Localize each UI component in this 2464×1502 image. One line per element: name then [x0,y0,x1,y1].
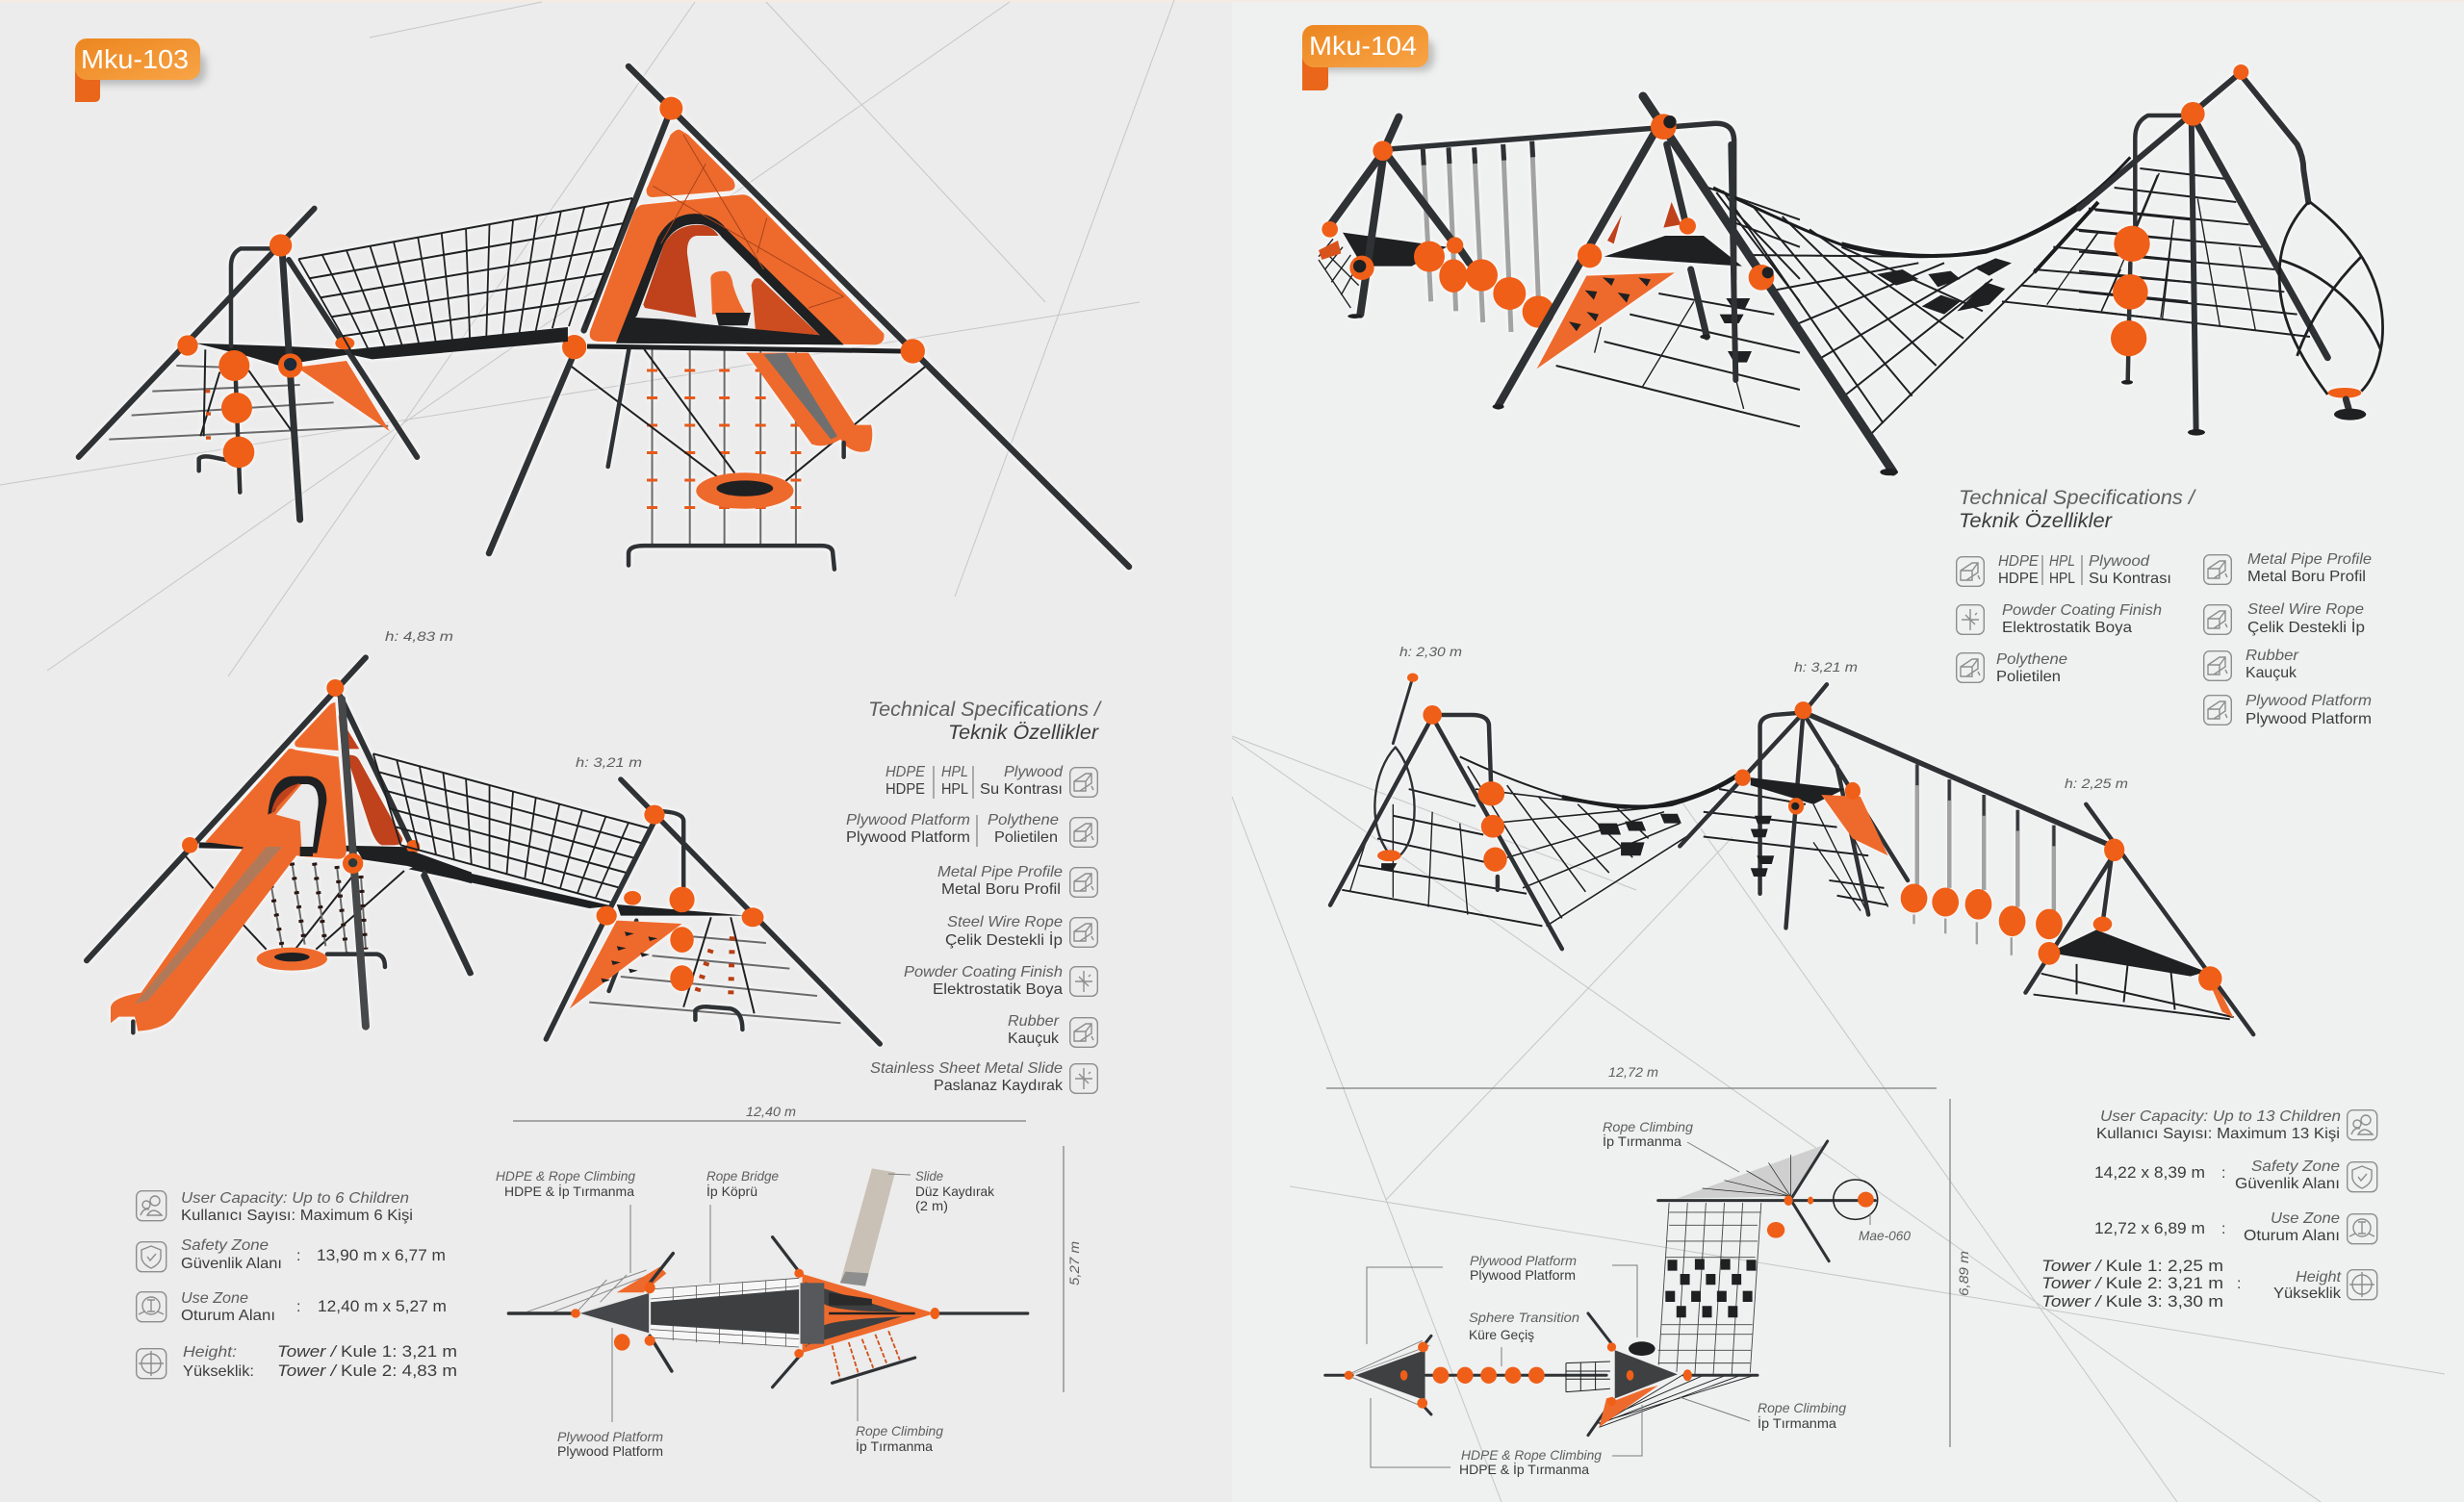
spec: Rubber [1008,1013,1097,1047]
spec: HDPE HPL Plywood: HPL [941,781,968,798]
use zone: 12,40 m x 5,27 m [318,1297,447,1315]
dimension label: h 3,21 m: h: 3,21 m [576,754,642,770]
user capacity [2096,1108,2377,1142]
user capacity: User Capacity: Up to 13 Children [2100,1108,2341,1125]
heading: Teknik Özellikler [948,722,1099,744]
bridge net and small tower [373,753,880,1044]
badge: Mku-104 [1302,25,1434,90]
callouts: Mku-104 plan: HDPE & İp Tırmanma [1459,1461,1589,1477]
spec: HDPE HPL Plywood: Su Kontrası [2089,571,2171,587]
saddle net [1643,96,2192,475]
callouts: Mku-104 plan: Rope Climbing [1603,1119,1693,1134]
spec: Rubber [2204,648,2299,681]
callouts: Mku-104 plan: Sphere Transition [1469,1310,1579,1325]
height [137,1342,457,1380]
left tower with bridge floor [79,209,568,520]
rope ladder and swing [570,347,927,570]
plan dimensions: Mku-103: 12,40 m [746,1104,796,1119]
callouts: Mku-103 plan: HDPE & Rope Climbing [496,1168,635,1184]
specifications: Mku-104 dimensions [2041,1108,2377,1311]
heading: Technical Specifications / [868,699,1102,721]
safety zone [2094,1158,2377,1192]
spec: HDPE HPL Plywood: HDPE [886,781,925,798]
spec: Powder Coating Finish: Powder Coating Finish [904,964,1063,980]
safety zone: : [296,1248,300,1264]
plan view: Mku-104 [1325,1141,1878,1436]
badge: Mku-104: Mku-104 [1309,31,1417,61]
heading: Technical Specifications / [1959,487,2196,509]
spec: Plywood Platform, Polythene: Polietilen [994,829,1058,846]
spec: Polythene: Polythene [1996,651,2067,668]
spec: Metal Pipe Profile: Metal Pipe Profile [2247,551,2372,568]
big tower with arch and slide [584,118,902,467]
spec: HDPE HPL Plywood [886,764,1097,799]
spec: Metal Pipe Profile [2204,551,2372,585]
spec: Powder Coating Finish: Powder Coating Finish [2002,602,2162,619]
callouts: Mku-103 plan: Düz Kaydırak [915,1184,995,1199]
user capacity: Kullanıcı Sayısı: Maximum 6 Kişi [181,1208,413,1224]
safety zone: Safety Zone [181,1237,269,1254]
tower joints [562,97,925,364]
use zone: Oturum Alanı [2244,1228,2340,1244]
spec: HDPE HPL Plywood: HPL [2049,553,2075,570]
right tower with spinner ring [2079,64,2383,436]
callouts: Mku-104 plan: Plywood Platform [1470,1267,1576,1283]
user capacity: Kullanıcı Sayısı: Maximum 13 Kişi [2096,1126,2340,1142]
callouts: Mku-103 plan: (2 m) [915,1198,948,1213]
height: Height [2296,1269,2342,1286]
callouts: Mku-103 plan: HDPE & İp Tırmanma [504,1183,634,1199]
use zone: Use Zone [2271,1210,2340,1227]
spec: HDPE HPL Plywood: Plywood [2089,553,2150,570]
heading: Teknik Özellikler [1959,510,2113,532]
spec: Metal Pipe Profile: Metal Boru Profil [2247,569,2366,585]
safety zone [137,1237,446,1272]
hero render: Mku-104 front view [1319,64,2383,475]
spec: HDPE HPL Plywood: HDPE [1998,571,2039,587]
spec: Polythene: Polietilen [1996,669,2061,685]
spec: Plywood Platform, Polythene: Plywood Platform [846,829,970,846]
spec: Plywood Platform, Polythene [846,812,1097,847]
specifications: Mku-103 materials [846,699,1102,1094]
spec: Powder Coating Finish [904,964,1097,998]
spec: Steel Wire Rope [945,914,1097,949]
use zone: : [2221,1221,2225,1237]
use zone: : [296,1299,300,1315]
tower legs [489,66,1129,567]
hero render: Mku-103 front view [79,66,1129,570]
height [2041,1257,2377,1311]
height: Tower / Kule 1: 3,21 m [277,1342,457,1361]
user capacity: User Capacity: Up to 6 Children [181,1190,409,1207]
use zone: Use Zone [181,1290,248,1307]
spec: Steel Wire Rope: Çelik Destekli İp [945,930,1063,949]
spec: Powder Coating Finish [1957,602,2162,636]
spec: HDPE HPL Plywood: HDPE [886,764,925,780]
spec: Metal Pipe Profile [937,864,1097,898]
spec: Stainless Sheet Metal Slide: Stainless Sheet Metal Slide [870,1060,1063,1077]
spec: Stainless Sheet Metal Slide [870,1060,1097,1094]
spec: Plywood Platform: Plywood Platform [2246,711,2372,727]
callouts: Mku-104 plan: İp Tırmanma [1758,1414,1836,1431]
height: Yükseklik: [183,1363,254,1380]
badge: Mku-103: Mku-103 [81,44,189,74]
callouts: Mku-103 plan: Rope Climbing [856,1423,943,1438]
spec: Stainless Sheet Metal Slide: Paslanaz Kaydırak [934,1078,1064,1094]
safety zone: 14,22 x 8,39 m [2094,1163,2205,1182]
spec: HDPE HPL Plywood [1957,553,2171,587]
use zone [2094,1210,2377,1244]
spec: Steel Wire Rope: Steel Wire Rope [2247,601,2364,618]
rope bridge net [298,198,632,355]
dimension label: h 4,83 m: h: 4,83 m [385,628,453,644]
callouts: Mku-103 plan: Plywood Platform [557,1443,663,1459]
callouts: Mku-104 plan: Mae-060 [1859,1228,1911,1243]
callouts: Mku-104 plan: HDPE & Rope Climbing [1461,1447,1602,1463]
callouts: Mku-103 plan: İp Tırmanma [856,1438,933,1454]
spec: HDPE HPL Plywood: HPL [2049,571,2075,587]
callouts: Mku-103 plan: Plywood Platform [557,1429,663,1444]
callouts: Mku-104 plan: Küre Geçiş [1469,1327,1534,1342]
swing beam towers [1319,117,1800,426]
tower with slide [87,657,472,1032]
spec: Metal Pipe Profile: Metal Boru Profil [941,881,1061,898]
side render: Mku-104 rear view [1330,673,2253,1034]
spec: Rubber: Rubber [1008,1013,1060,1030]
dimension labels: Mku-104 towers [1399,644,2128,791]
specifications: Mku-104 materials [1957,487,2372,727]
heading [868,699,1102,744]
specifications: Mku-103 dimensions [137,1190,457,1380]
spec: Plywood Platform: Plywood Platform [2246,693,2372,709]
callouts: Mku-104 plan [1367,1119,1911,1477]
safety zone: : [2221,1165,2225,1182]
dimension labels: Mku-104 towers: h: 2,25 m [2065,776,2128,791]
spec: Steel Wire Rope: Çelik Destekli İp [2247,618,2365,636]
safety zone: 13,90 m x 6,77 m [317,1246,446,1264]
spec: Rubber: Kauçuk [1008,1031,1060,1047]
use zone [137,1290,447,1324]
spec: Plywood Platform, Polythene: Plywood Platform [846,812,970,828]
heading [1959,487,2196,532]
callouts: Mku-104 plan: Rope Climbing [1758,1400,1846,1415]
user capacity [137,1190,413,1224]
use zone: Oturum Alanı [181,1308,275,1324]
spec: Steel Wire Rope [2204,601,2365,636]
plan view: Mku-103 [508,1168,1028,1387]
dimension labels: Mku-104 towers: h: 2,30 m [1399,644,1462,659]
centre tower joint [1651,114,1677,140]
height: Tower / Kule 2: 4,83 m [277,1362,457,1380]
callouts: Mku-103 plan: Slide [915,1168,943,1184]
spec: Steel Wire Rope: Steel Wire Rope [947,914,1063,930]
spec: Powder Coating Finish: Elektrostatik Boya [933,981,1063,998]
callouts: Mku-104 plan: İp Tırmanma [1603,1133,1681,1149]
plan dimensions: Mku-104 [1326,1064,1971,1447]
plan dimensions: Mku-103 [513,1104,1082,1392]
dimension labels: Mku-104 towers: h: 3,21 m [1794,659,1858,675]
spec: HDPE HPL Plywood: Su Kontrası [980,781,1063,798]
callouts: Mku-103 plan: İp Köprü [706,1183,757,1199]
plan dimensions: Mku-103: 5,27 m [1066,1241,1082,1286]
safety zone: Safety Zone [2251,1158,2340,1175]
safety zone: Güvenlik Alanı [2235,1176,2340,1192]
spec: Plywood Platform, Polythene: Polythene [988,812,1059,828]
height: Tower / Kule 3: 3,30 m [2041,1292,2223,1311]
spec: Rubber: Kauçuk [2246,665,2297,681]
spec: Powder Coating Finish: Elektrostatik Boya [2002,620,2132,636]
spec: Polythene [1957,651,2067,685]
panel: Mku-103 [75,38,1129,1459]
badge: Mku-103 [75,38,206,102]
spec: HDPE HPL Plywood: Plywood [1004,764,1064,780]
spec: Rubber: Rubber [2246,648,2299,664]
spec: HDPE HPL Plywood: HPL [941,764,968,780]
callouts: Mku-103 plan [496,1168,995,1459]
callouts: Mku-104 plan: Plywood Platform [1470,1253,1577,1268]
spec: Metal Pipe Profile: Metal Pipe Profile [937,864,1063,880]
height: Tower / Kule 1: 2,25 m [2041,1257,2223,1275]
height: Tower / Kule 2: 3,21 m [2041,1274,2223,1292]
plan dimensions: Mku-104: 12,72 m [1608,1064,1658,1080]
spec: Plywood Platform [2204,693,2372,727]
height: : [2237,1276,2241,1292]
spec: HDPE HPL Plywood: HDPE [1998,553,2039,570]
side render: Mku-103 rear view [87,657,880,1044]
callouts: Mku-103 plan: Rope Bridge [706,1168,779,1184]
plan dimensions: Mku-104: 6,89 m [1956,1251,1971,1296]
panel: Mku-104 [1302,25,2383,1477]
use zone: 12,72 x 6,89 m [2094,1219,2205,1237]
safety zone: Güvenlik Alanı [181,1256,282,1272]
height: Yükseklik [2273,1286,2342,1302]
height: Height: [183,1344,237,1361]
